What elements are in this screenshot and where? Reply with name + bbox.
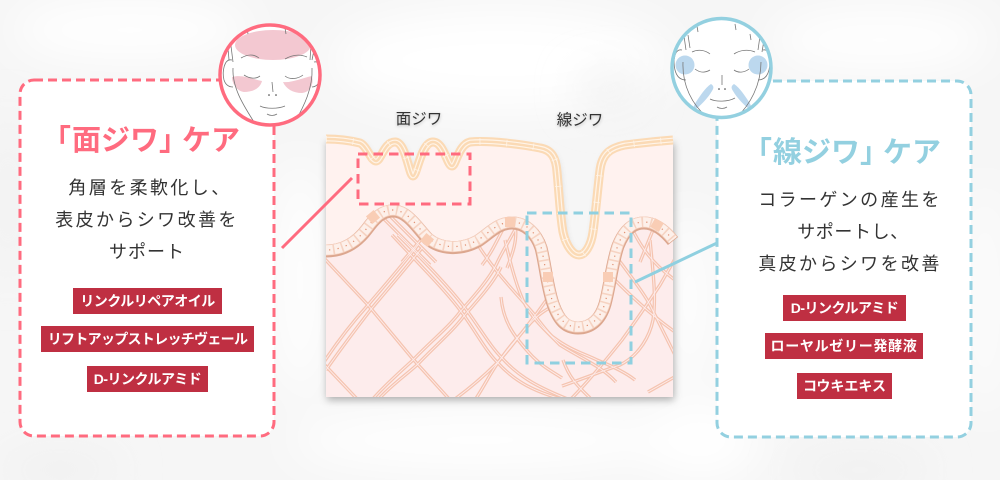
tag: リフトアップストレッチヴェール [41,326,254,352]
label: 面ジワ: 面ジワ [396,111,442,128]
heading: 」 [159,125,188,157]
text block: コラーゲンの産生を [758,190,942,210]
label: 線ジワ: 線ジワ [557,112,603,129]
tag: D-リンクルアミド [87,366,208,392]
text block: 表皮からシワ改善を [55,210,239,230]
heading: 線ジワ ケア [773,137,941,169]
icon: face with forehead and under-eye areas [218,23,322,127]
tag: ローヤルゼリー発酵液 [765,333,923,359]
heading: 「 [42,125,71,157]
text block: サポート [109,242,185,262]
skin block with shadow [326,139,673,397]
heading: 」 [860,137,889,169]
tag: D-リンクルアミド: D-リンクルアミド [94,371,201,387]
icon: face with cheek and nasolabial areas [670,16,773,120]
tag: リフトアップストレッチヴェール: リフトアップストレッチヴェール [48,331,247,347]
tag: コウキエキス: コウキエキス [803,378,886,394]
tag: ローヤルゼリー発酵液: ローヤルゼリー発酵液 [770,338,918,354]
text block [55,178,239,262]
callout: red dashed box and connector [281,152,472,249]
tag: D-リンクルアミド [783,295,906,321]
panel: 線ジワケア [716,80,972,438]
heading: 「 [743,137,772,169]
text block: 角層を柔軟化し、 [68,178,232,198]
darker cells [366,210,664,282]
tag: リンクルリペアオイル [73,288,222,314]
basal cell layer [326,210,673,328]
tag: コウキエキス [797,373,892,399]
callout: blue dashed box and connector [526,212,716,364]
tag: リンクルリペアオイル: リンクルリペアオイル [80,293,215,309]
text block: 真皮からシワを改善 [758,254,942,274]
epidermis surface band [326,139,673,255]
tag: D-リンクルアミド: D-リンクルアミド [791,300,898,316]
text block [758,190,942,274]
text block: サポートし、 [797,222,909,242]
panel: 面ジワケア [18,78,276,438]
dermis with collagen fibers [326,218,673,397]
heading: 面ジワ ケア [72,125,240,157]
diagram: skin cross-section [322,134,678,404]
